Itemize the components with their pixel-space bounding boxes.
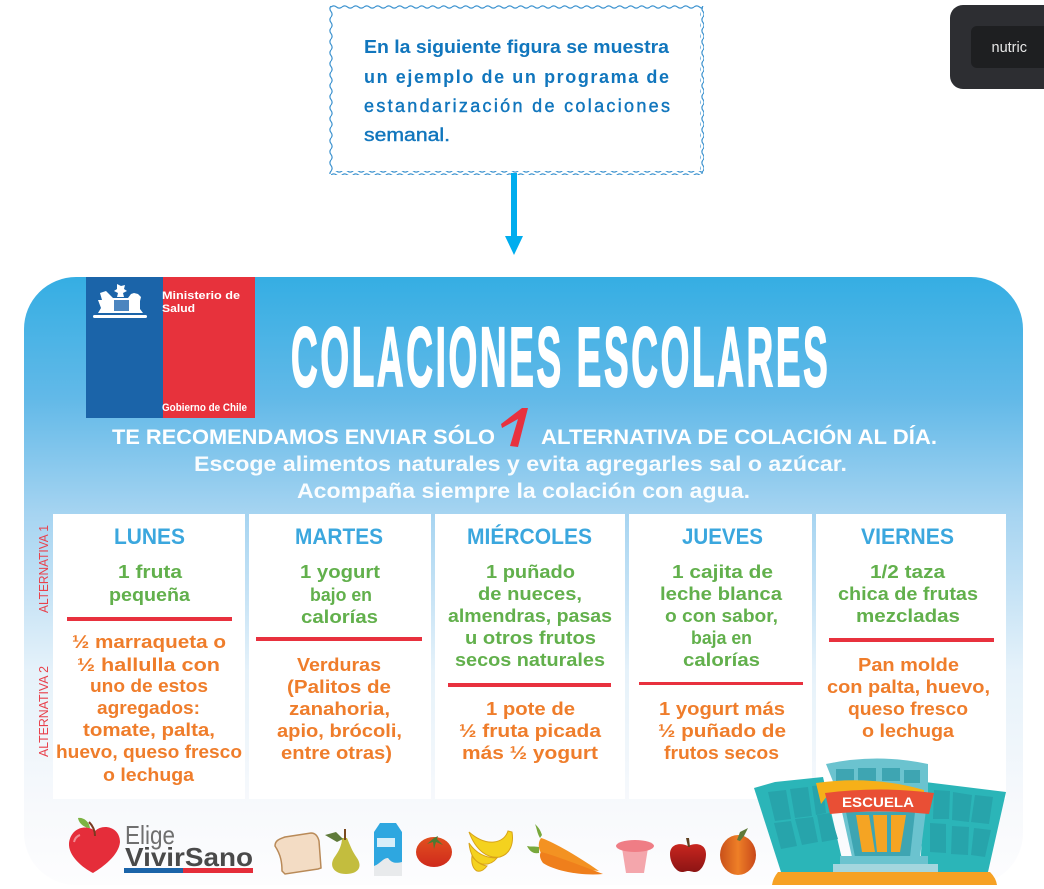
column: jueves: ½ puñado de (658, 720, 786, 741)
panel: poster (24, 277, 1023, 885)
wing windows (768, 785, 993, 857)
logo: Elige Vivir Sano: Elige (125, 820, 175, 850)
column: viernes: mezcladas (856, 605, 960, 626)
icon: tomato (416, 836, 452, 867)
column: jueves: JUEVES (682, 524, 763, 549)
column: miércoles: MIÉRCOLES (467, 524, 592, 549)
logo: Ministerio de Salud: Salud (162, 303, 195, 315)
column: martes: apio, brócoli, (277, 720, 402, 741)
column: jueves: 1 cajita de (672, 561, 773, 582)
column: miércoles: 1 pote de (486, 698, 575, 719)
column: viernes (816, 514, 1006, 799)
column: martes: Verduras (297, 654, 381, 675)
right wing (920, 782, 1006, 872)
column: lunes: ½ hallulla con (77, 654, 220, 675)
callout: intro text box: semanal. (364, 125, 450, 145)
column: jueves: leche blanca (660, 583, 783, 604)
icon: red apple (670, 838, 706, 872)
column: martes: 1 yogurt (300, 561, 380, 582)
logo: Ministerio de Salud: Ministerio de (162, 290, 240, 302)
arrow: from callout to poster (505, 173, 523, 255)
column: martes: (Palitos de (287, 676, 391, 697)
recommendation text: Acompaña siempre la colación con agua. (297, 480, 750, 503)
logo: Elige Vivir Sano: VivirSano (125, 842, 253, 872)
column: lunes: pequeña (109, 584, 191, 605)
column: viernes: chica de frutas (838, 583, 978, 604)
column: viernes: VIERNES (861, 524, 954, 549)
side label: alternativa 2: ALTERNATIVA 2 (36, 666, 51, 757)
dark tooltip (950, 5, 1044, 89)
column: martes: MARTES (295, 524, 383, 549)
column: miércoles: más ½ yogurt (462, 742, 598, 763)
column: miércoles: de nueces, (478, 583, 582, 604)
recommendation text: Escoge alimentos naturales y evita agregarles sal o azúcar. (194, 453, 847, 476)
column: martes: entre otras) (281, 742, 392, 763)
column: jueves: baja en (691, 627, 752, 648)
sign backing (816, 780, 924, 804)
column: viernes: Pan molde (858, 654, 959, 675)
column: miércoles: almendras, pasas (448, 605, 612, 626)
column: martes: zanahoria, (289, 698, 390, 719)
illustration: school building (754, 758, 1006, 885)
icon: bananas (469, 831, 512, 871)
title: COLACIONES ESCOLARES (291, 310, 828, 404)
icon: milk carton (374, 823, 402, 876)
column: jueves: o con sabor, (665, 605, 778, 626)
side label: alternativa 1: ALTERNATIVA 1 (36, 525, 51, 613)
column: miércoles: u otros frutos (465, 627, 596, 648)
callout: intro text box: En la siguiente figura se muestra (364, 37, 670, 57)
recommendation text: ALTERNATIVA DE COLACIÓN AL DÍA. (541, 424, 937, 449)
column: lunes (53, 514, 245, 799)
column: viernes: 1/2 taza (870, 561, 946, 582)
dark tooltip: nutric (992, 40, 1027, 56)
column: martes: bajo en (310, 584, 372, 605)
column: jueves (629, 514, 812, 799)
column: miércoles: secos naturales (455, 649, 605, 670)
sign banner (825, 790, 934, 814)
column: martes (249, 514, 431, 799)
logo: Ministerio de Salud: Gobierno de Chile (162, 402, 247, 414)
icon: carrots (527, 824, 603, 874)
sign text: ESCUELA (842, 794, 914, 810)
column: lunes: ½ marraqueta o (72, 631, 226, 652)
callout: intro text box: un ejemplo de un programa de (364, 67, 669, 87)
logo: Elige Vivir Sano (69, 818, 253, 873)
column: jueves: frutos secos (664, 742, 779, 763)
column: lunes: huevo, queso fresco (56, 741, 242, 762)
column: viernes: queso fresco (848, 698, 968, 719)
column: viernes: con palta, huevo, (827, 676, 990, 697)
column: lunes: o lechuga (103, 764, 195, 785)
steps (840, 856, 928, 865)
column: lunes: tomate, palta, (83, 719, 215, 740)
callout: intro text box: estandarización de colaciones (364, 96, 670, 116)
column: lunes: uno de estos (90, 675, 208, 696)
column: miércoles: 1 puñado (486, 561, 575, 582)
icon: pear (325, 829, 360, 874)
column: jueves: calorías (683, 649, 760, 670)
left wing (754, 777, 845, 872)
column: lunes: agregados: (97, 697, 200, 718)
column: miércoles (435, 514, 625, 799)
column: jueves: 1 yogurt más (659, 698, 785, 719)
center block (826, 758, 928, 857)
ground (772, 872, 997, 885)
column: miércoles: ½ fruta picada (459, 720, 602, 741)
column: viernes: o lechuga (862, 720, 955, 741)
callout: intro text box (329, 5, 704, 175)
column: martes: calorías (301, 606, 378, 627)
column: lunes: LUNES (114, 524, 185, 549)
icon: orange fruit (720, 828, 756, 875)
recommendation text (112, 408, 937, 503)
doorway (846, 812, 915, 857)
column: lunes: 1 fruta (118, 561, 183, 582)
icon: yogurt cup (616, 840, 654, 873)
recommendation text: TE RECOMENDAMOS ENVIAR SÓLO (112, 424, 495, 449)
logo: Ministerio de Salud (86, 277, 255, 418)
icon: bread (275, 833, 321, 874)
